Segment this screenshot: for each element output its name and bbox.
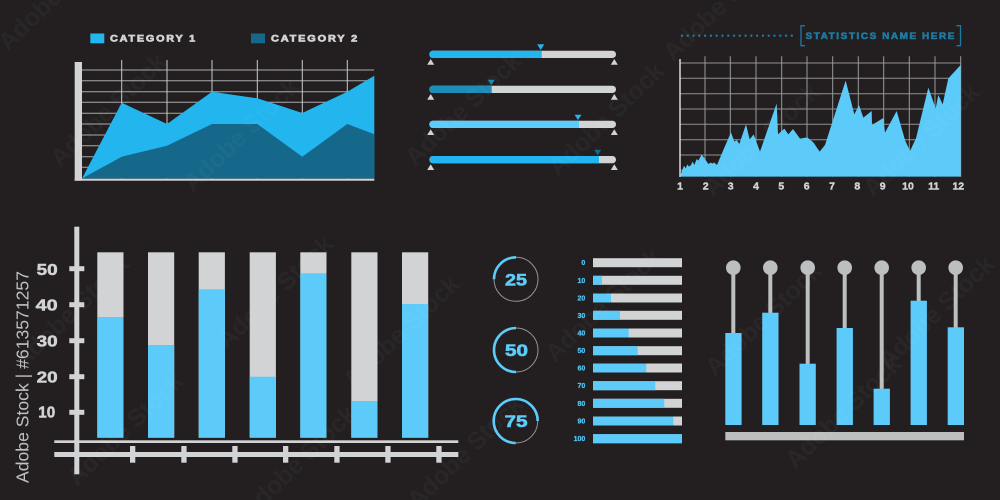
y axis labels: 20 <box>37 370 58 387</box>
x axis labels <box>677 180 964 192</box>
stems and knobs <box>726 260 963 390</box>
stock id text: Adobe Stock | #613571257 <box>12 271 32 483</box>
watermarks: Adobe Stock <box>338 270 465 394</box>
x axis labels: 12 <box>952 180 964 192</box>
circular gauges <box>494 257 538 443</box>
x axis labels: 4 <box>753 180 759 192</box>
stacked bar chart <box>36 227 458 474</box>
base bar <box>725 432 964 440</box>
percentage labels: 100 <box>574 436 585 443</box>
percentage labels: 60 <box>578 366 585 372</box>
x axis labels: 1 <box>677 180 683 192</box>
legend: category 1 and category 2: CATEGORY 2 <box>271 34 359 44</box>
y axis labels <box>36 262 58 422</box>
watermarks: Adobe Stock <box>400 47 527 171</box>
percentage labels: 10 <box>578 278 585 285</box>
slider bars <box>427 44 618 170</box>
heading: statistics name here: STATISTICS NAME HERE <box>806 31 956 41</box>
x axis labels: 3 <box>728 180 734 192</box>
gauge 50: 50 <box>505 342 528 360</box>
watermarks: Adobe Stock <box>543 57 670 181</box>
horizontal percentage bars <box>574 258 682 443</box>
area chart: twelve period statistics <box>677 56 964 192</box>
watermarks: Adobe Stock <box>698 78 825 202</box>
gauge 75: 75 <box>504 413 528 431</box>
blue bars <box>725 301 964 425</box>
percentage labels: 90 <box>578 418 585 426</box>
y axis labels: 50 <box>37 262 58 279</box>
percentage labels: 20 <box>578 296 585 302</box>
gauge 75 <box>494 399 538 443</box>
watermarks: Adobe Stock <box>858 78 985 202</box>
legend: category 1 and category 2 <box>90 34 359 44</box>
watermarks: Adobe Stock <box>540 243 667 367</box>
y axis labels: 10 <box>38 404 55 422</box>
watermarks: Adobe Stock <box>62 367 189 491</box>
x axis labels: 11 <box>928 180 939 192</box>
heading: statistics name here <box>682 26 960 46</box>
watermarks: Adobe Stock <box>8 250 135 374</box>
x axis labels: 2 <box>703 180 709 192</box>
x axis labels: 5 <box>778 180 784 192</box>
x axis labels: 6 <box>804 180 810 192</box>
x axis labels: 10 <box>902 180 914 192</box>
percentage labels: 40 <box>578 330 585 338</box>
x axis labels: 8 <box>854 180 860 192</box>
bars: blue values <box>97 273 428 438</box>
watermarks: Adobe Stock <box>212 230 339 354</box>
watermarks: Adobe Stock <box>780 350 907 474</box>
x axis labels: 9 <box>880 180 886 192</box>
gauge 25 <box>494 257 538 301</box>
watermarks: Adobe Stock <box>700 257 827 381</box>
percentage labels: 50 <box>578 348 585 355</box>
gauge 25: 25 <box>505 271 527 289</box>
watermarks: Adobe Stock <box>45 48 172 172</box>
watermarks: Adobe Stock <box>873 250 1000 374</box>
watermarks: Adobe Stock <box>178 73 305 197</box>
bars: grey totals <box>97 252 428 438</box>
percentage labels: 70 <box>578 383 585 390</box>
legend: category 1 and category 2: CATEGORY 1 <box>110 34 197 44</box>
lollipop bar chart <box>725 260 964 440</box>
gauge 50 <box>494 328 538 372</box>
axes and ticks <box>54 227 458 474</box>
percentage labels <box>574 260 585 443</box>
y axis labels: 30 <box>37 334 58 351</box>
x axis labels: 7 <box>829 180 835 192</box>
percentage labels: 80 <box>578 401 585 408</box>
y axis labels: 40 <box>36 298 58 315</box>
percentage labels: 0 <box>581 260 585 267</box>
area chart: categories over time <box>75 60 374 181</box>
percentage labels: 30 <box>578 313 585 320</box>
